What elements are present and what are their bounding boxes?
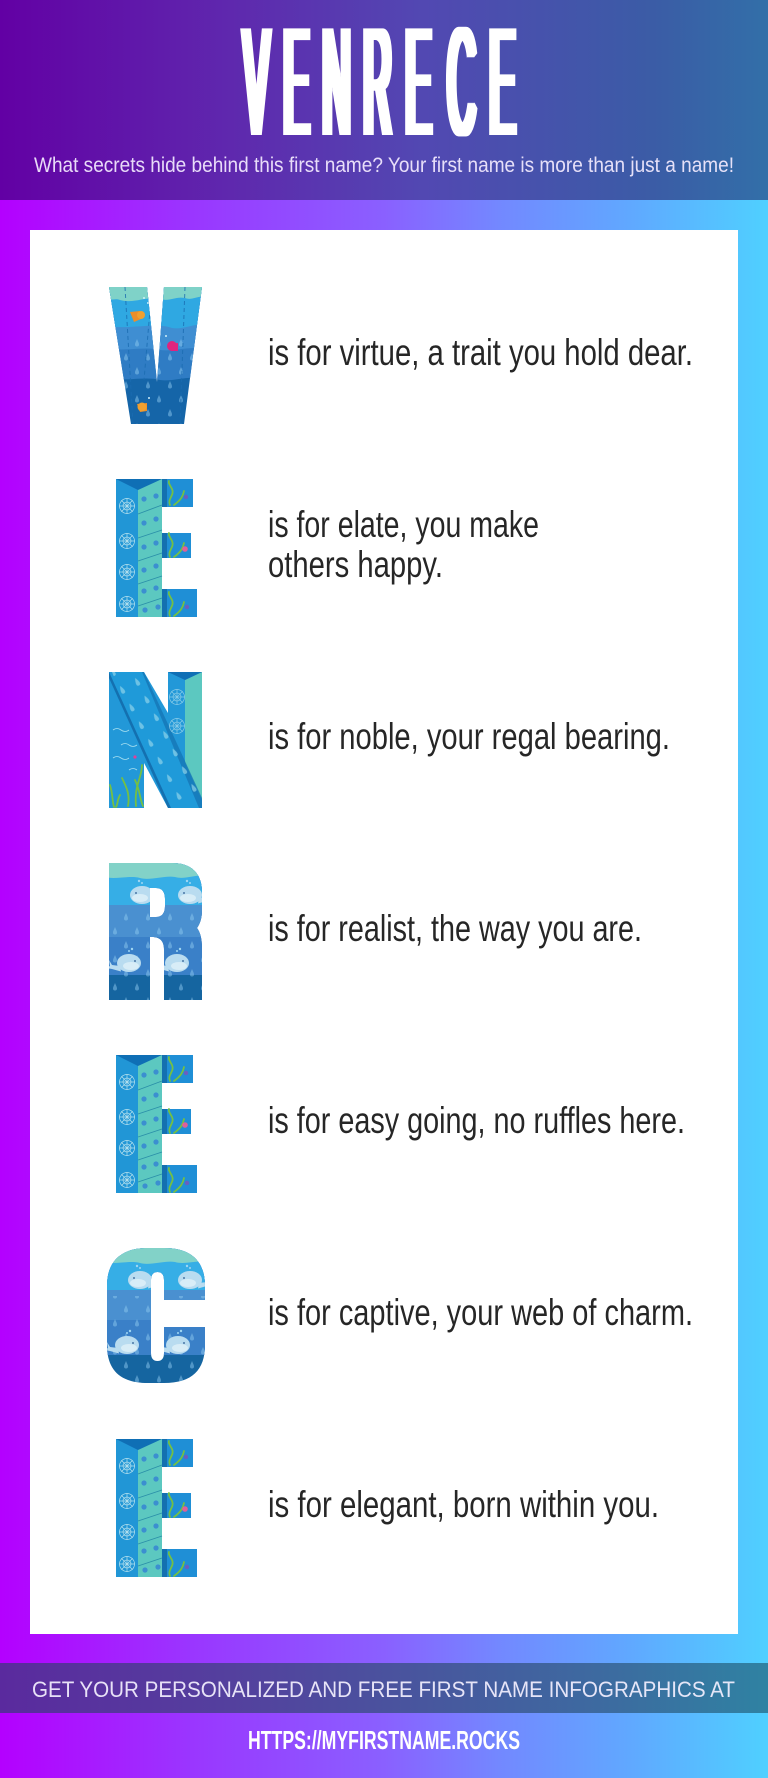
icon: letter R bbox=[109, 863, 202, 1000]
text: R: is for realist, the way you are. bbox=[268, 908, 642, 949]
text: N: is for noble, your regal bearing. bbox=[268, 716, 670, 757]
footer call to action: GET YOUR PERSONALIZED AND FREE FIRST NAME INFOGRAPHICS AT bbox=[32, 1677, 735, 1702]
title: VENRECE bbox=[244, 0, 515, 168]
text: E elate: is for elate, you make bbox=[268, 504, 539, 545]
icon: letter E bbox=[116, 1439, 197, 1577]
icon: letter C bbox=[107, 1248, 205, 1383]
text: E elegant: is for elegant, born within you. bbox=[268, 1484, 659, 1525]
text: E elate bbox=[268, 504, 539, 585]
header band bbox=[0, 0, 768, 200]
footer band bbox=[0, 1663, 768, 1713]
footer url: HTTPS://MYFIRSTNAME.ROCKS bbox=[248, 1725, 520, 1755]
icon: letter V bbox=[109, 287, 202, 424]
text: E elate: others happy. bbox=[268, 544, 443, 585]
icon: letter E bbox=[116, 1055, 197, 1193]
icon: letter N bbox=[105, 670, 205, 810]
icon: letter E bbox=[116, 479, 197, 617]
white content panel bbox=[30, 230, 738, 1634]
